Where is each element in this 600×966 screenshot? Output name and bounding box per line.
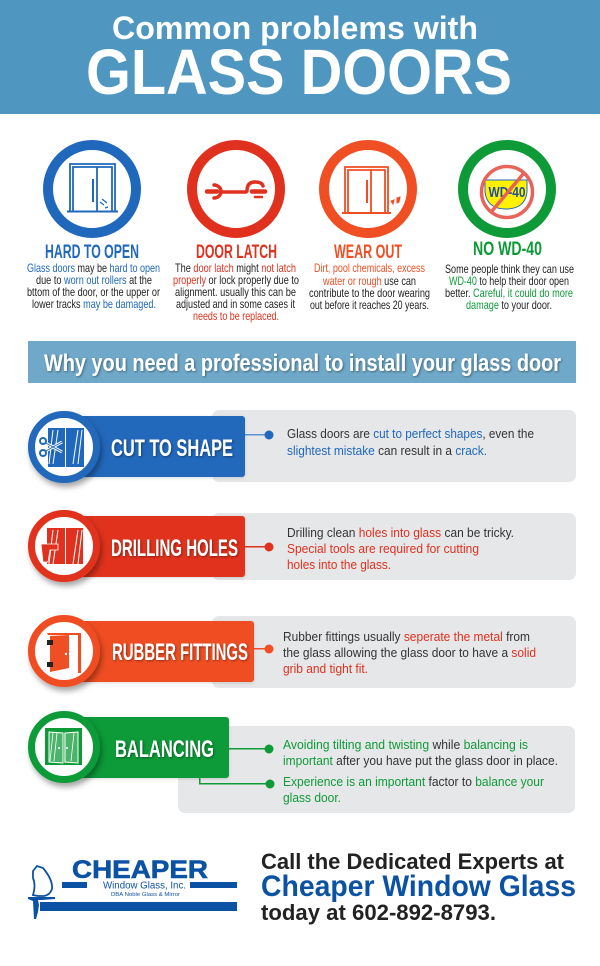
description: Avoiding tilting and twisting while balancing is: [283, 737, 528, 752]
description: Rubber fittings usually seperate the metal from: [283, 629, 530, 644]
description: [283, 629, 536, 676]
description: bttom of the door, or the upper or: [27, 285, 160, 299]
icon: parrot: [28, 866, 55, 919]
description: [445, 262, 574, 312]
connector: [245, 430, 274, 440]
call to action: today at 602-892-8793.: [261, 900, 496, 925]
label: RUBBER FITTINGS: [112, 639, 248, 666]
description: the glass allowing the glass door to have a solid: [283, 645, 536, 660]
panel: door latch: [173, 145, 299, 323]
icon: no WD-40: [463, 145, 551, 233]
label: BALANCING: [115, 736, 214, 763]
panel: drilling holes: [32, 513, 576, 580]
panel: rubber fittings: [32, 616, 576, 688]
description: Dirt, pool chemicals, excess: [314, 261, 425, 275]
connector: [254, 644, 274, 654]
logo: CHEAPER: [72, 856, 208, 884]
description: [287, 525, 514, 572]
description: grib and tight fit.: [283, 661, 368, 676]
icon: door and drill: [32, 514, 96, 578]
connectors: [199, 744, 274, 788]
description: [283, 737, 558, 805]
icon: sliding door: [48, 145, 136, 233]
description: WD-40 to help their door open: [449, 274, 569, 288]
panel: no WD-40: [445, 145, 574, 312]
icon: open door with hinges: [32, 618, 96, 684]
description: contribute to the door wearing: [309, 286, 430, 300]
description: needs to be replaced.: [193, 309, 279, 323]
title line 2: GLASS DOORS: [86, 36, 512, 108]
description: lower tracks may be damaged.: [32, 297, 156, 311]
description: important after you have put the glass door in place.: [283, 753, 558, 768]
connector: [245, 542, 274, 552]
label bar: [80, 416, 245, 477]
label bar: [80, 621, 254, 682]
description: [173, 261, 299, 323]
panel: cut to shape: [32, 410, 576, 482]
label: CUT TO SHAPE: [111, 435, 233, 462]
icon: door and scissors: [32, 414, 96, 480]
panel: hard to open: [27, 145, 160, 311]
description: Drilling clean holes into glass can be tricky.: [287, 525, 514, 540]
section banner: [28, 341, 576, 383]
description: better. Careful, it could do more: [445, 286, 573, 300]
description: due to worn out rollers at the: [36, 273, 152, 287]
header band: [0, 0, 600, 114]
heading: NO WD-40: [473, 239, 542, 260]
description: out before it reaches 20 years.: [310, 298, 429, 312]
description: adjusted and in some cases it: [176, 297, 295, 311]
logo: DBA Noble Glass & Mirror: [111, 892, 180, 898]
description: slightest mistake can result in a crack.: [287, 443, 487, 458]
description: [309, 261, 430, 312]
description: Glass doors may be hard to open: [27, 261, 160, 275]
description: The door latch might not latch: [175, 261, 296, 275]
description: glass door.: [283, 790, 341, 805]
description: damage to your door.: [466, 298, 552, 312]
logo: Window Glass, Inc.: [103, 880, 186, 892]
icon: double door: [32, 714, 96, 780]
icon: worn door: [324, 145, 412, 233]
description: Glass doors are cut to perfect shapes, even the: [287, 426, 534, 441]
call to action: Cheaper Window Glass: [261, 870, 576, 903]
label bar: [80, 516, 245, 577]
description: water or rough use can: [322, 274, 416, 288]
label: DRILLING HOLES: [111, 535, 238, 562]
title line 1: Common problems with: [112, 10, 478, 46]
description: [27, 261, 160, 311]
label bar: [80, 717, 229, 778]
description: Special tools are required for cutting: [287, 541, 479, 556]
panel: balancing: [32, 714, 575, 813]
heading: DOOR LATCH: [196, 242, 277, 263]
call to action: Call the Dedicated Experts at: [261, 849, 565, 874]
description: [287, 426, 534, 458]
icon: no WD-40: WD-40: [488, 184, 526, 201]
description: alignment. usually this can be: [175, 285, 296, 299]
description: Experience is an important factor to balance your: [283, 774, 545, 789]
heading: HARD TO OPEN: [45, 242, 139, 263]
call to action: [261, 849, 576, 925]
description: holes into the glass.: [287, 557, 391, 572]
logo: [28, 856, 237, 919]
heading: WEAR OUT: [334, 242, 402, 263]
icon: latch: [192, 145, 280, 233]
description: properly or lock properly due to: [173, 273, 299, 287]
panel: wear out: [309, 145, 430, 312]
